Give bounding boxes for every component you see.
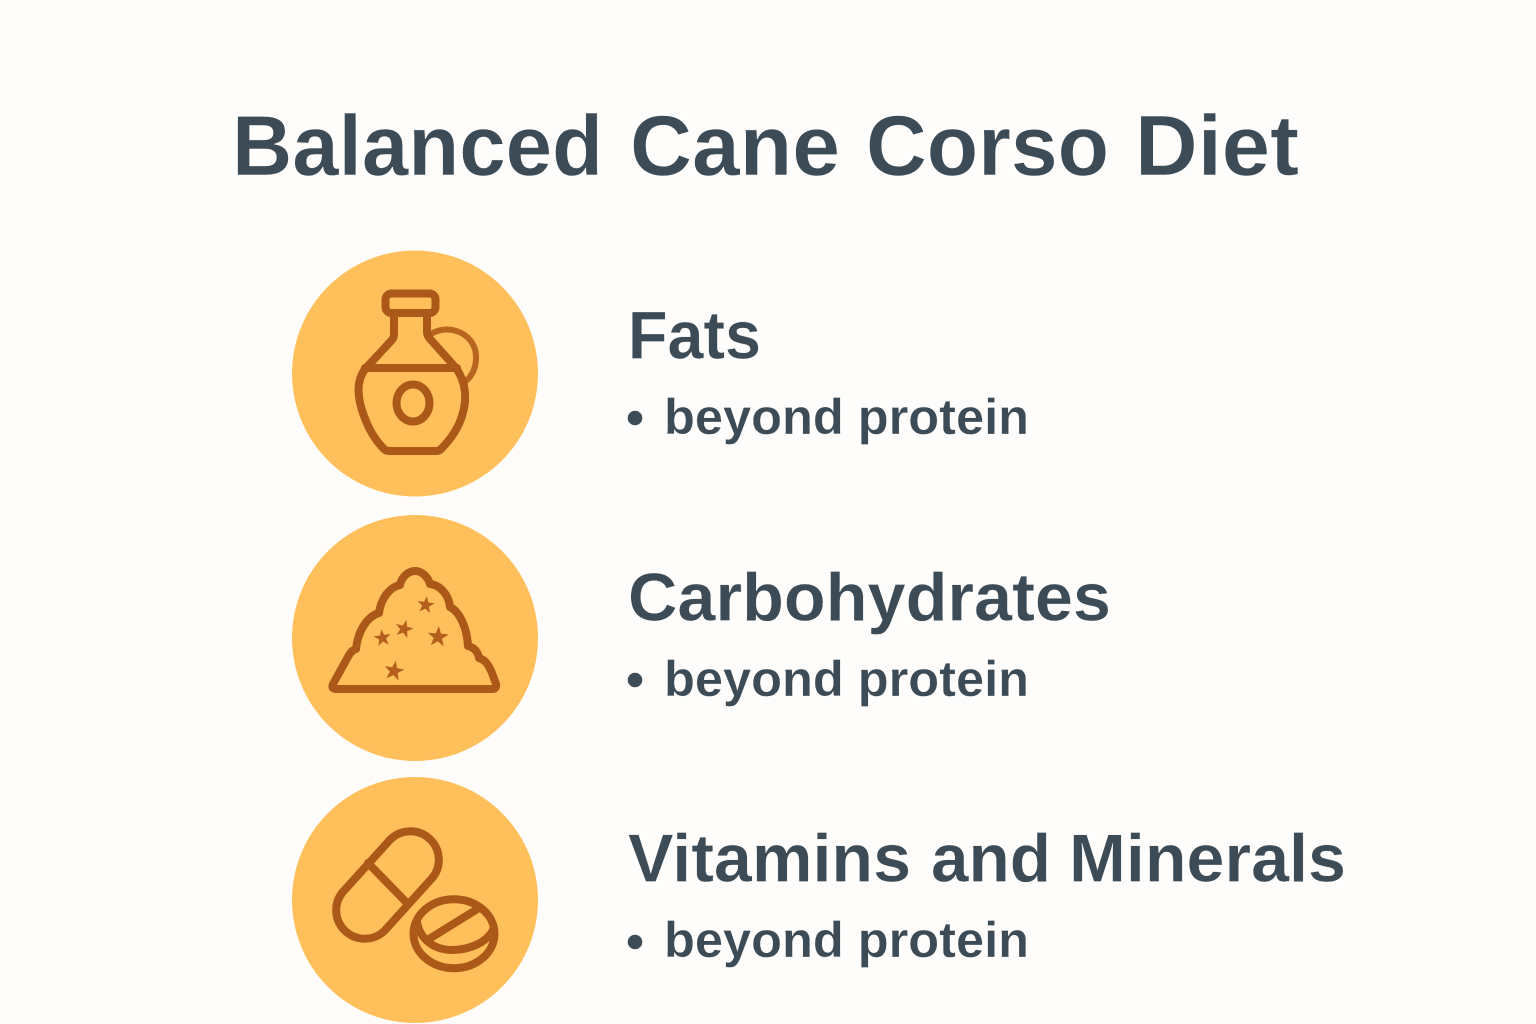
title: Balanced — [232, 99, 603, 194]
panel: vitamins and minerals — [292, 777, 1346, 1023]
panel: carbohydrates — [292, 515, 1111, 761]
icon: capsule and tablet — [292, 777, 538, 1023]
title: Corso — [866, 99, 1109, 194]
title — [232, 99, 1299, 194]
title: Diet — [1135, 99, 1299, 194]
title: Cane — [630, 99, 840, 194]
heading: Vitamins and Minerals: Minerals — [1069, 821, 1346, 897]
icon: oil bottle — [292, 250, 538, 496]
heading: Vitamins and Minerals: and — [931, 821, 1051, 897]
heading: Vitamins and Minerals — [628, 821, 1346, 897]
heading: Vitamins and Minerals: Vitamins — [628, 821, 911, 897]
heading: Carbohydrates: Carbohydrates — [628, 560, 1111, 636]
bullet: beyond protein: beyond protein — [664, 651, 1029, 707]
bullet: beyond protein: beyond protein — [664, 912, 1029, 968]
panel: fats — [292, 250, 1029, 496]
icon: grain pile — [292, 515, 538, 761]
bullet: beyond protein: beyond protein — [664, 389, 1029, 445]
heading: Fats: Fats — [628, 298, 761, 374]
